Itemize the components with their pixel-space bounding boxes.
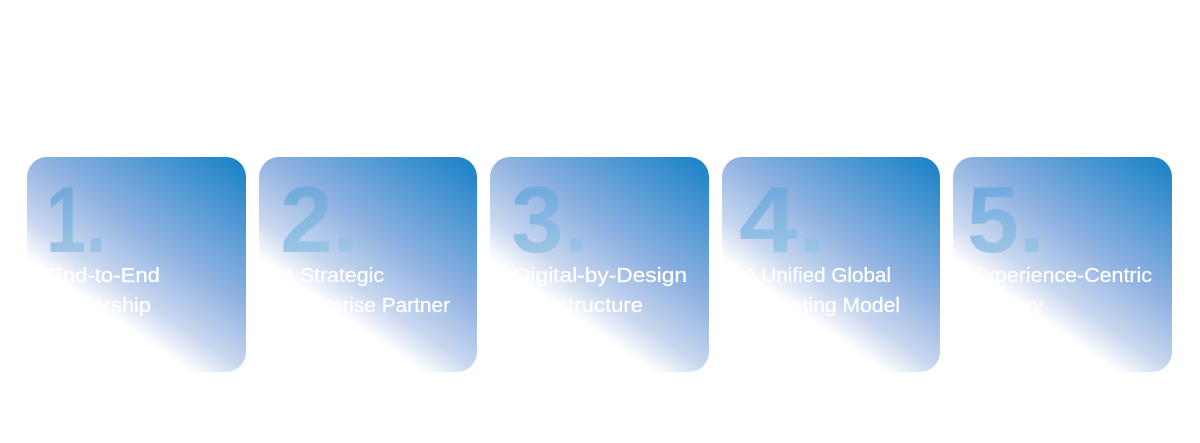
- number 4: 4.: [739, 167, 827, 272]
- number 1: 1.: [46, 167, 106, 272]
- label: A Unified Global Operating Model: A Unified Global: [743, 265, 891, 287]
- label: Experience-Centric Delivery: [970, 265, 1152, 317]
- panel: card 4: [722, 157, 940, 372]
- panel: card 2: [259, 157, 477, 372]
- label: Experience-Centric Delivery: Experience-Centric: [970, 265, 1152, 287]
- panel: card 5: [953, 157, 1172, 372]
- label: End-to-End Ownership: Ownership: [47, 295, 151, 317]
- panel: card 3: [490, 157, 709, 372]
- label: A Strategic Enterprise Partner: Enterprise Partner: [281, 295, 450, 317]
- number 3: 3.: [511, 167, 590, 272]
- label: Digital-by-Design Infrastructure: Digital-by-Design: [514, 265, 687, 287]
- label: End-to-End Ownership: [47, 265, 160, 317]
- label: Digital-by-Design Infrastructure: Infrastructure: [513, 295, 643, 317]
- label: A Unified Global Operating Model: Operating Model: [744, 295, 900, 317]
- panel: card 1: [27, 157, 246, 372]
- label: A Strategic Enterprise Partner: A Strategic: [281, 265, 384, 287]
- number 5: 5.: [967, 167, 1045, 272]
- label: End-to-End Ownership: End-to-End: [48, 265, 160, 287]
- label: Digital-by-Design Infrastructure: [513, 265, 687, 317]
- number 2: 2.: [280, 167, 359, 272]
- label: Experience-Centric Delivery: Delivery: [971, 295, 1043, 317]
- label: A Strategic Enterprise Partner: [281, 265, 450, 317]
- label: A Unified Global Operating Model: [743, 265, 900, 317]
